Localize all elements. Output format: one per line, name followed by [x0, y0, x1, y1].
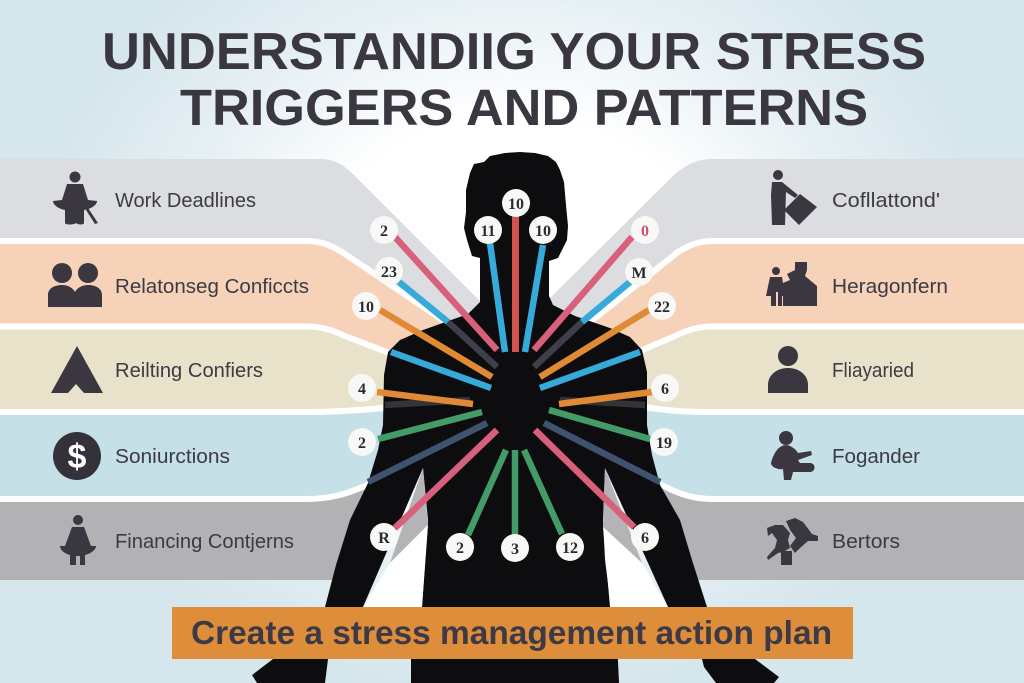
icon: person by building — [766, 262, 817, 306]
banner: action plan: Create a stress management action plan — [191, 614, 832, 651]
number badges: 22 — [654, 299, 670, 316]
number badges: 3 — [511, 541, 519, 558]
radiating trigger lines — [368, 215, 660, 535]
icon: person with empty pockets — [60, 515, 96, 565]
label: relating conflicts: Reilting Confiers — [115, 360, 263, 382]
title — [102, 23, 926, 136]
icon: person with box — [771, 170, 817, 225]
label: heragonfern: Heragonfern — [832, 276, 948, 298]
number badges: M — [631, 265, 647, 282]
number badges: 10 — [358, 299, 374, 316]
icon: person bust — [768, 346, 808, 393]
icon: dollar coin — [53, 432, 101, 480]
panel: right stress trigger bands — [548, 159, 1024, 580]
label: sources: Soniurctions — [115, 446, 230, 468]
number badges: 10 — [508, 196, 524, 213]
gap between right arm and torso — [603, 468, 668, 607]
number badges: 6 — [661, 381, 669, 398]
label: work deadlines: Work Deadlines — [115, 190, 256, 212]
number badges: 2 — [456, 540, 464, 557]
icon: struggling figures — [767, 518, 818, 565]
number badges: 10 — [535, 223, 551, 240]
title: TRIGGERS AND PATTERNS — [180, 79, 868, 136]
label: fogander: Fogander — [832, 446, 920, 468]
gap between left arm and torso — [363, 468, 428, 607]
number badges: 2 — [358, 435, 366, 452]
label: financing concerns: Financing Contjerns — [115, 531, 294, 553]
human silhouette — [252, 152, 779, 683]
icon: tent — [51, 346, 103, 393]
number badges — [348, 189, 679, 562]
number badges: 0 — [641, 223, 649, 240]
number badges: 6 — [641, 530, 649, 547]
number badges: 23 — [381, 264, 397, 281]
icon: two people — [48, 263, 102, 307]
number badges: 12 — [562, 540, 578, 557]
number badges: 19 — [656, 435, 672, 452]
number badges: 4 — [358, 381, 366, 398]
label: conflict right: Cofllattond' — [832, 190, 940, 212]
label: relationship conflicts: Relatonseg Conficcts — [115, 276, 309, 298]
label: bertors: Bertors — [832, 531, 900, 553]
panel: left stress trigger bands — [0, 159, 482, 580]
title: UNDERSTANDIIG YOUR STRESS — [102, 23, 926, 81]
label: fliayaried: Fliayaried — [832, 360, 914, 382]
icon: kicking figure — [771, 431, 814, 480]
number badges: 2 — [380, 223, 388, 240]
banner: action plan — [172, 607, 853, 659]
number badges: 11 — [480, 223, 496, 240]
number badges: R — [378, 530, 390, 547]
icon: dollar coin: $ — [68, 438, 87, 476]
icon: person at desk — [53, 172, 98, 224]
